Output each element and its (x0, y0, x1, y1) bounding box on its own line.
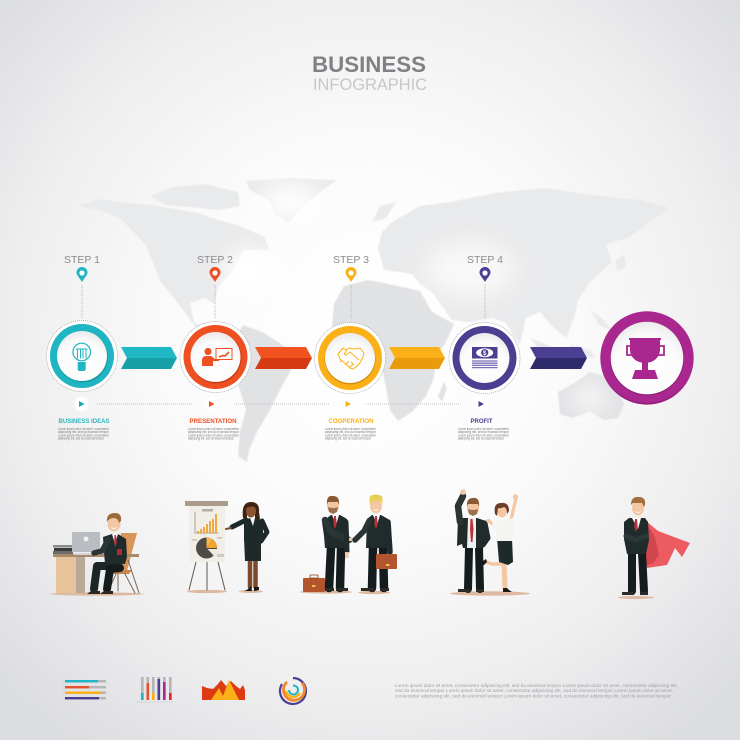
step 1 (46, 254, 118, 392)
footer text: sed do eiusmod tempor Lorem ipsum dolor sit amet, consectetur adipiscing elit, sed do eiusmod tempor Lorem ipsum dolor sit amet, (395, 688, 673, 693)
label: profit: Lorem ipsum dolor sit amet, consectetur (458, 433, 510, 437)
step 2: STEP 2 (197, 254, 233, 266)
label: profit: adipiscing elit, sed do eiusmod tempor (458, 437, 505, 441)
label: profit: adipiscing elit, sed do eiusmod tempor (458, 430, 510, 434)
label: cooperation (325, 419, 377, 441)
step 3: STEP 3 (333, 254, 369, 266)
chart icon: radial donut (280, 678, 306, 704)
arrow 2 (255, 347, 312, 369)
label: presentation: PRESENTATION (190, 419, 236, 425)
arrow 1 (121, 347, 177, 369)
arrow 4 (530, 347, 587, 369)
label: profit: Lorem ipsum dolor sit amet, consectetur (458, 427, 510, 431)
label: business ideas: BUSINESS IDEAS (58, 419, 110, 425)
label: profit: PROFIT (470, 419, 493, 425)
illustration: celebrating man and woman (450, 489, 530, 596)
step 3 (314, 254, 386, 394)
illustration: two businessmen shaking hands (300, 495, 397, 594)
label: business ideas: Lorem ipsum dolor sit amet, consectetur (58, 427, 110, 431)
icon: money stack: $ (483, 351, 487, 357)
illustration: man working at desk (50, 513, 144, 596)
footer text: consectetur adipiscing elit, sed do eiusmod tempor Lorem ipsum dolor sit amet, consectetur adipiscing elit, sed do eiusmod tempor (395, 694, 671, 698)
world map (78, 178, 670, 462)
title: BUSINESS (312, 52, 426, 77)
footer text: Lorem ipsum dolor sit amet, consectetur adipiscing elit, sed do eiusmod tempor Lorem ipsum dolor sit amet, consectetur adipiscing elit, (395, 683, 678, 688)
step 4 (449, 254, 520, 394)
step 1: STEP 1 (64, 254, 100, 266)
icon: handshake (338, 348, 364, 369)
label: presentation: adipiscing elit, sed do eiusmod tempor (188, 437, 235, 441)
illustration: businessman with red cape (618, 497, 690, 599)
title (312, 52, 427, 94)
label: business ideas: adipiscing elit, sed do eiusmod tempor (58, 430, 110, 434)
timeline dotted connectors (97, 403, 461, 405)
footer text (395, 683, 678, 698)
label: cooperation: adipiscing elit, sed do eiusmod tempor (325, 437, 372, 441)
label: business ideas (58, 419, 110, 441)
label: cooperation: Lorem ipsum dolor sit amet, consectetur (325, 427, 377, 431)
title: INFOGRAPHIC (313, 75, 427, 94)
label: cooperation: Lorem ipsum dolor sit amet, consectetur (325, 433, 377, 437)
play buttons (74, 397, 488, 411)
label: cooperation: adipiscing elit, sed do eiusmod tempor (325, 430, 377, 434)
icon: presenter (202, 348, 232, 366)
label: presentation: Lorem ipsum dolor sit amet, consectetur (188, 433, 240, 437)
step 2 (180, 254, 251, 392)
label: presentation: Lorem ipsum dolor sit amet, consectetur (188, 427, 240, 431)
chart icon: area peaks (202, 680, 245, 700)
illustration: woman presenting flip chart (185, 501, 267, 593)
step 4: STEP 4 (467, 254, 503, 266)
label: presentation (188, 419, 240, 441)
label: presentation: adipiscing elit, sed do eiusmod tempor (188, 430, 240, 434)
arrow 3 (389, 347, 445, 369)
icon: trophy (627, 338, 664, 379)
label: profit (458, 419, 510, 441)
trophy goal circle (600, 311, 694, 405)
chart icon: vertical bars (137, 677, 173, 702)
icon: light bulb (73, 343, 90, 371)
label: cooperation: COOPERATION (328, 419, 374, 425)
label: business ideas: Lorem ipsum dolor sit amet, consectetur (58, 433, 110, 437)
chart icon: horizontal bars (64, 679, 106, 700)
label: business ideas: adipiscing elit, sed do eiusmod tempor (58, 437, 105, 441)
